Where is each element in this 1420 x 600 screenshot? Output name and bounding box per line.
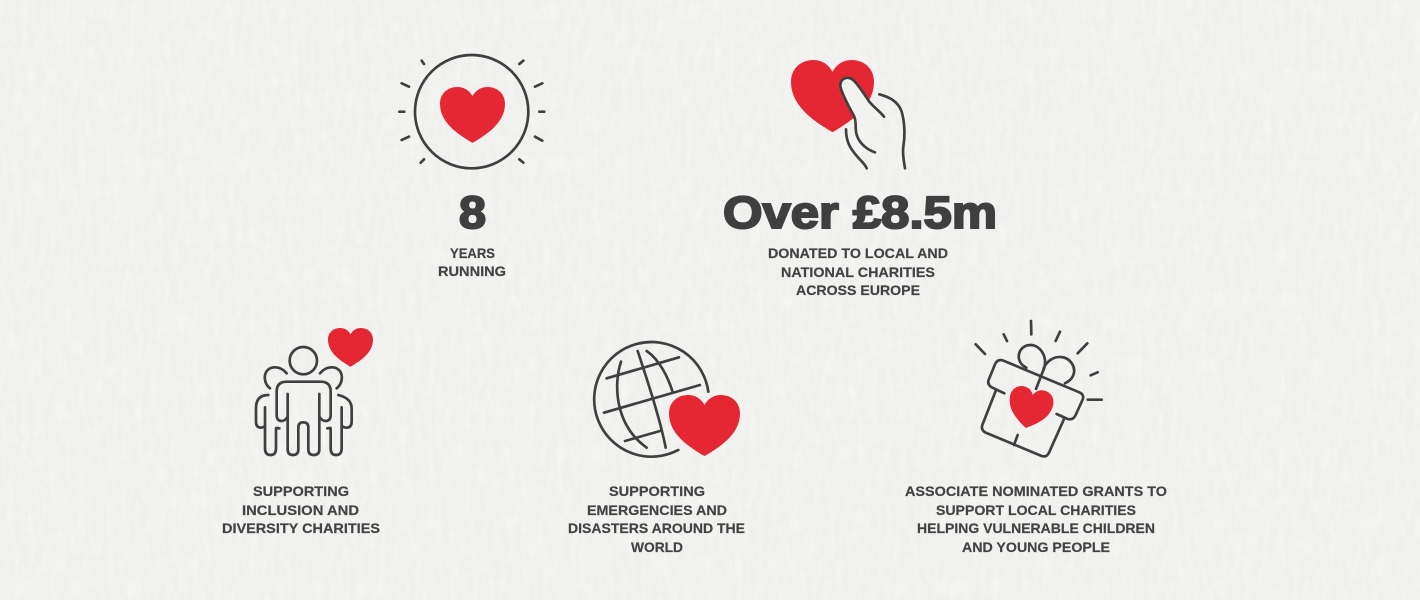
icon: people with heart	[256, 328, 373, 455]
icon: hand holding heart	[791, 60, 905, 168]
label: emergencies and disasters: EMERGENCIES AND	[587, 502, 727, 518]
stat: over 8.5m: Over £8.5m	[723, 187, 997, 238]
label: donated	[768, 245, 948, 298]
label: years running: YEARS	[450, 245, 495, 261]
label: inclusion and diversity: DIVERSITY CHARITIES	[222, 520, 380, 536]
label: years running	[438, 245, 506, 279]
icon: globe with heart	[594, 342, 740, 457]
label: inclusion and diversity: INCLUSION AND	[242, 502, 359, 518]
label: associate grants: HELPING VULNERABLE CHILDREN	[917, 520, 1155, 536]
label: associate grants: ASSOCIATE NOMINATED GRANTS TO	[905, 483, 1167, 499]
label: associate grants: SUPPORT LOCAL CHARITIES	[936, 502, 1136, 518]
label: inclusion and diversity: SUPPORTING	[253, 483, 349, 499]
stat: 8: 8	[459, 187, 486, 238]
label: years running: RUNNING	[438, 263, 506, 279]
icon: heart in sun circle	[399, 55, 544, 168]
label: emergencies and disasters: DISASTERS AROUND THE	[568, 520, 745, 536]
label: donated: DONATED TO LOCAL AND	[768, 245, 948, 261]
label: associate grants	[905, 483, 1167, 555]
label: donated: NATIONAL CHARITIES	[781, 264, 935, 280]
label: emergencies and disasters: SUPPORTING	[609, 483, 705, 499]
label: emergencies and disasters	[568, 483, 745, 555]
label: associate grants: AND YOUNG PEOPLE	[962, 539, 1110, 555]
icon: gift box with heart	[976, 321, 1102, 456]
label: inclusion and diversity	[222, 483, 380, 536]
label: donated: ACROSS EUROPE	[796, 282, 920, 298]
label: emergencies and disasters: WORLD	[631, 539, 683, 555]
